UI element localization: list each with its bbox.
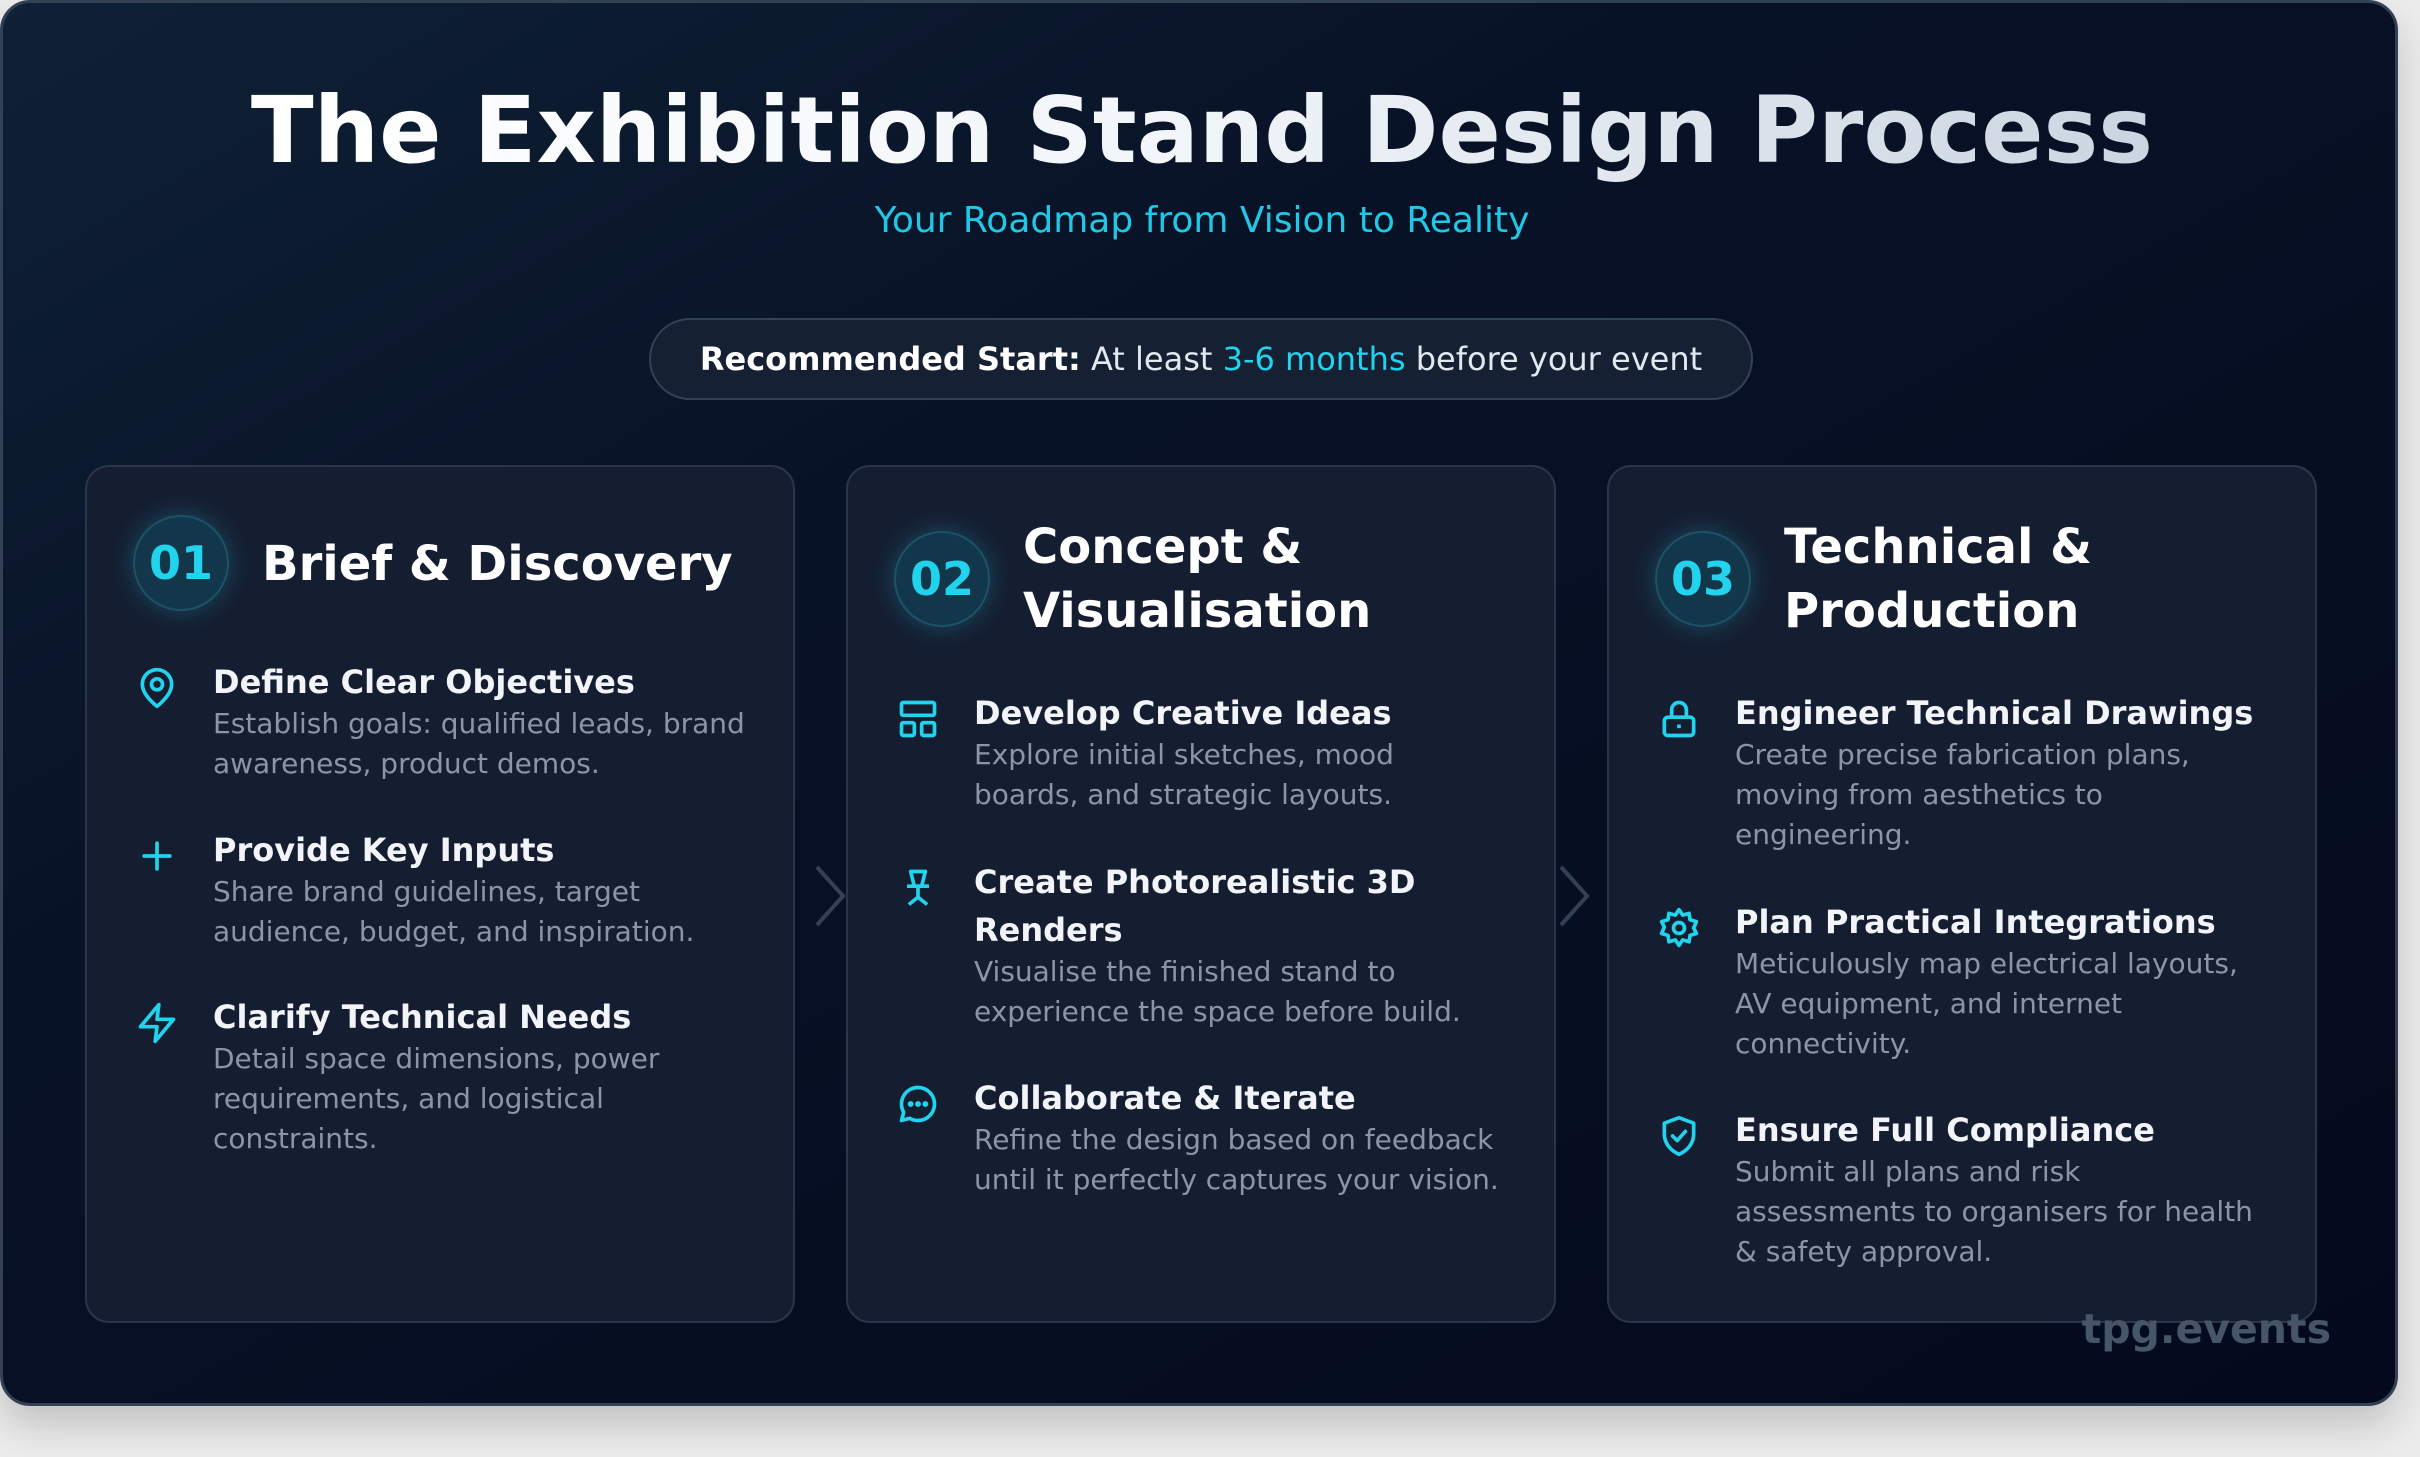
step number 03	[1655, 531, 1751, 627]
title: The Exhibition Stand Design Process	[251, 77, 2153, 184]
item: 3D renders: Create Photorealistic 3D	[974, 863, 1415, 901]
item: objectives: awareness, product demos.	[213, 747, 600, 780]
item: technical needs	[138, 998, 660, 1155]
item: inputs: Share brand guidelines, target	[213, 875, 640, 908]
item: compliance: Submit all plans and risk	[1735, 1155, 2080, 1188]
heading: Visualisation	[1023, 583, 1371, 639]
item: objectives: Establish goals: qualified leads, brand	[213, 707, 745, 740]
item: drawings: moving from aesthetics to	[1735, 778, 2103, 811]
item: technical needs: Clarify Technical Needs	[213, 998, 631, 1036]
item: technical needs: constraints.	[213, 1122, 378, 1155]
heading: Brief & Discovery	[262, 536, 733, 592]
item: integrations	[1660, 903, 2238, 1060]
item: integrations: Plan Practical Integrations	[1735, 903, 2216, 941]
heading	[1023, 519, 1371, 639]
item: creative ideas	[900, 694, 1394, 811]
panel: concept & visualisation	[846, 465, 1556, 1323]
item: objectives	[140, 663, 745, 780]
item: compliance: Ensure Full Compliance	[1735, 1111, 2155, 1149]
item: iterate: until it perfectly captures your vision.	[974, 1163, 1499, 1196]
item: technical needs: Detail space dimensions, power	[213, 1042, 659, 1075]
item: iterate: Refine the design based on feedback	[974, 1123, 1493, 1156]
item: drawings: Engineer Technical Drawings	[1735, 694, 2253, 732]
item: drawings: engineering.	[1735, 818, 1911, 851]
icon: lightning	[138, 1002, 176, 1044]
icon: render	[907, 870, 929, 906]
icon: plus	[142, 841, 172, 871]
item: compliance: & safety approval.	[1735, 1235, 1992, 1268]
icon: gear	[1660, 908, 1698, 948]
item: iterate: Collaborate & Iterate	[974, 1079, 1356, 1117]
watermark: tpg.events	[2082, 1305, 2331, 1353]
step number 02: 02	[910, 552, 974, 606]
item: integrations: AV equipment, and internet	[1735, 987, 2122, 1020]
heading	[1784, 519, 2092, 639]
step number 01: 01	[149, 536, 213, 590]
heading: Concept &	[1023, 519, 1302, 575]
callout: recommended start: Recommended Start: At least 3-6 months before your event	[700, 340, 1702, 378]
item: 3D renders: Visualise the finished stand to	[974, 955, 1396, 988]
item: inputs: audience, budget, and inspiration.	[213, 915, 694, 948]
item: 3D renders	[907, 863, 1461, 1028]
item: integrations: Meticulously map electrical layouts,	[1735, 947, 2238, 980]
panel: brief & discovery	[85, 465, 795, 1323]
icon: map pin	[140, 668, 174, 708]
step number 03: 03	[1671, 552, 1735, 606]
heading: Technical &	[1784, 519, 2092, 575]
icon: layout	[900, 700, 936, 738]
icon: lock	[1662, 700, 1696, 738]
item: compliance	[1662, 1111, 2253, 1268]
arrow: 2 to 3	[1560, 866, 1590, 926]
item: 3D renders: experience the space before build.	[974, 995, 1461, 1028]
item: compliance: assessments to organisers for health	[1735, 1195, 2253, 1228]
item: 3D renders: Renders	[974, 911, 1123, 949]
item: integrations: connectivity.	[1735, 1027, 1911, 1060]
item: drawings: Create precise fabrication plans,	[1735, 738, 2190, 771]
item: technical needs: requirements, and logistical	[213, 1082, 604, 1115]
item: creative ideas: Explore initial sketches, mood	[974, 738, 1394, 771]
item: creative ideas: boards, and strategic layouts.	[974, 778, 1392, 811]
item: inputs: Provide Key Inputs	[213, 831, 554, 869]
step number 01	[133, 515, 229, 611]
item: iterate	[900, 1079, 1499, 1196]
icon: shield	[1662, 1116, 1696, 1156]
heading: Production	[1784, 583, 2079, 639]
item: drawings	[1662, 694, 2253, 851]
step number 02	[894, 531, 990, 627]
callout: recommended start	[649, 318, 1753, 400]
icon: chat	[900, 1086, 936, 1122]
panel: technical & production	[1607, 465, 2317, 1323]
subtitle: Your Roadmap from Vision to Reality	[875, 200, 1529, 241]
item: creative ideas: Develop Creative Ideas	[974, 694, 1392, 732]
item: inputs	[142, 831, 694, 948]
item: objectives: Define Clear Objectives	[213, 663, 635, 701]
arrow: 1 to 2	[816, 866, 846, 926]
